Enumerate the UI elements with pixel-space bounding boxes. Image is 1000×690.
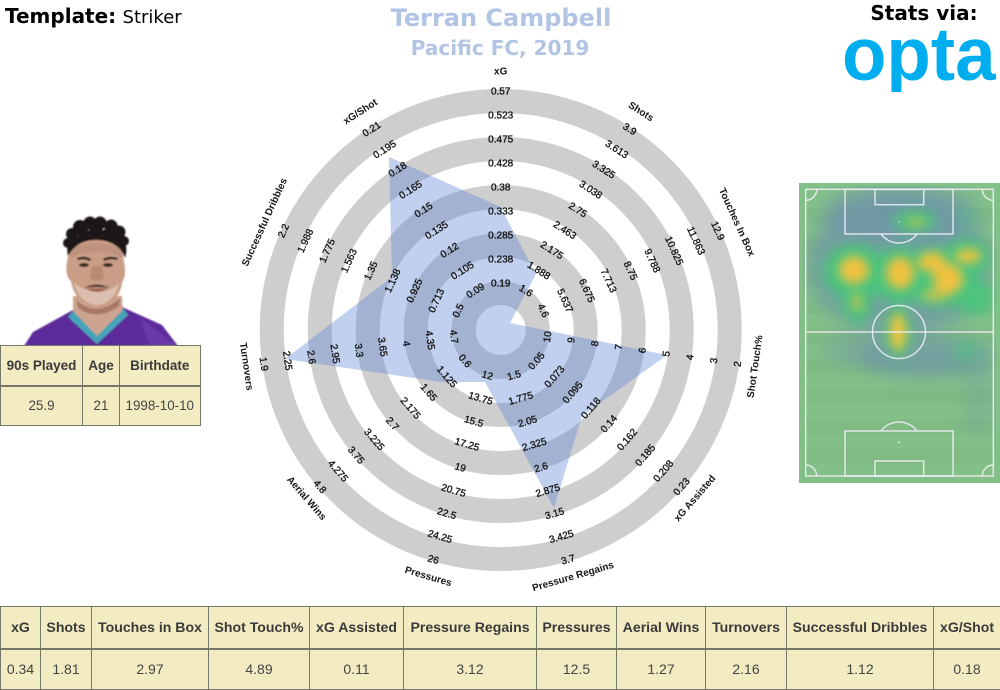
- axis: Successful Dribbles: 1.775: [318, 237, 338, 265]
- axis: xG Assisted: 0.073: [543, 364, 568, 390]
- axis: Touches In Box: 10.825: [662, 235, 685, 268]
- player info value row: 1998-10-10: [126, 398, 194, 413]
- metric header row: Pressure Regains: [410, 619, 530, 635]
- axis: xG Assisted: 0.14: [599, 413, 620, 435]
- axis: Shot Touch%: Shot Touch%: [746, 335, 766, 399]
- stats source label: Stats via:: [870, 1, 978, 25]
- axis: xG Assisted: 0.118: [579, 395, 604, 421]
- axis: xG: 0.428: [488, 158, 514, 170]
- player info value row: 21: [94, 398, 108, 413]
- axis: xG/Shot: xG/Shot: [342, 97, 380, 127]
- axis: Pressures: 26: [426, 553, 440, 567]
- metric value row: 0.11: [343, 661, 370, 677]
- axis: Pressure Regains: 2.6: [533, 461, 550, 475]
- metric header row: xG: [11, 619, 30, 635]
- metric value row: 12.5: [563, 661, 590, 677]
- axis: Shot Touch%: 8: [590, 340, 602, 347]
- axis: Touches In Box: Touches In Box: [716, 187, 757, 259]
- subtitle: Pacific FC, 2019: [411, 36, 589, 60]
- axis: xG/Shot: 0.12: [439, 241, 461, 261]
- axis: Shots: 3.038: [577, 179, 604, 202]
- axis: Successful Dribbles: 0.713: [427, 287, 447, 315]
- axis: Turnovers: 3.65: [375, 337, 389, 358]
- axis: xG Assisted: 0.208: [652, 458, 677, 485]
- axis: Pressures: 20.75: [440, 482, 467, 500]
- axis: Shots: 2.75: [566, 201, 589, 221]
- axis: xG: [488, 66, 514, 290]
- axis: xG/Shot: 0.105: [449, 259, 477, 283]
- axis: Touches In Box: 11.863: [684, 225, 707, 257]
- axis: Turnovers: 1.9: [257, 356, 270, 372]
- axis: Turnovers: 4.35: [423, 330, 436, 351]
- axis: Shot Touch%: 3: [709, 357, 720, 364]
- axis: xG: 0.475: [488, 134, 514, 146]
- axis: Shot Touch%: [538, 305, 766, 399]
- axis: xG Assisted: [514, 336, 718, 524]
- axis: Successful Dribbles: 0.5: [451, 302, 467, 320]
- axis: Touches In Box: 8.75: [621, 260, 639, 283]
- axis: Pressures: [403, 364, 512, 589]
- axis: xG: 0.57: [491, 86, 511, 98]
- metric header row: Pressures: [542, 619, 611, 635]
- table: player info: [0, 345, 200, 426]
- metric value row: 2.16: [732, 661, 760, 677]
- metric header row: xG Assisted: [316, 619, 397, 635]
- axis: Shots: 3.325: [590, 159, 617, 182]
- player value polygon: [285, 157, 667, 508]
- axis: xG: 0.19: [491, 278, 511, 290]
- axis: Touches In Box: 9.788: [641, 247, 662, 275]
- player photo: [24, 216, 178, 345]
- radar labels: [237, 66, 766, 594]
- player info header row: Birthdate: [130, 358, 189, 373]
- metric header row: Aerial Wins: [623, 619, 699, 635]
- axis: Pressures: 19: [453, 461, 467, 475]
- axis: xG Assisted: 0.095: [561, 379, 586, 406]
- axis: xG/Shot: 0.18: [387, 160, 410, 180]
- axis: Shots: [511, 100, 656, 304]
- axis: Turnovers: 4: [400, 340, 412, 348]
- axis: Touches In Box: 5.637: [554, 287, 575, 315]
- axis: Touches In Box: 7.713: [598, 267, 618, 295]
- axis: Pressure Regains: 1.775: [507, 390, 535, 408]
- axis: Aerial Wins: 1.125: [434, 364, 459, 391]
- axis: xG/Shot: 0.195: [372, 138, 399, 161]
- axis: Touches In Box: [522, 187, 757, 347]
- axis: Touches In Box: 4.6: [535, 302, 551, 320]
- axis: Touches In Box: 6.675: [576, 277, 597, 305]
- metric value row: 1.12: [846, 661, 874, 677]
- metric value row: 1.27: [647, 661, 675, 677]
- axis: Pressures: 22.5: [436, 506, 458, 522]
- pitch background: [799, 183, 1000, 483]
- table: metric values: [0, 606, 1000, 690]
- axis: xG Assisted: 0.185: [633, 442, 658, 469]
- pitch markings: [806, 189, 993, 476]
- metric value row: 0.18: [953, 661, 981, 677]
- axis: Shots: 2.463: [551, 219, 578, 242]
- axis: Turnovers: 3.3: [352, 343, 365, 359]
- axis: Turnovers: Turnovers: [237, 342, 255, 392]
- axis: Pressures: 15.5: [463, 414, 485, 430]
- metric value row: 2.97: [136, 661, 164, 677]
- axis: Successful Dribbles: 1.988: [296, 227, 316, 255]
- axis: xG: 0.38: [491, 182, 511, 194]
- axis: Successful Dribbles: 1.563: [339, 247, 360, 275]
- axis: Pressure Regains: 1.5: [506, 369, 523, 383]
- radar chart: [237, 66, 766, 594]
- axis: xG: 0.523: [488, 110, 514, 122]
- axis: xG Assisted: 0.23: [672, 476, 693, 498]
- heat layers: [807, 185, 995, 438]
- axis: Successful Dribbles: 0.925: [405, 277, 426, 305]
- metric value row: 4.89: [245, 661, 273, 677]
- axis: Pressure Regains: 3.7: [560, 553, 577, 568]
- axis: Turnovers: 2.95: [328, 343, 341, 365]
- axis: xG: 0.333: [488, 206, 514, 218]
- metric value row: 1.81: [52, 661, 80, 677]
- axis: xG: xG: [494, 66, 508, 78]
- axis: xG/Shot: [342, 97, 495, 306]
- axis: Aerial Wins: 2.7: [383, 415, 401, 433]
- grass stripes: [805, 209, 994, 464]
- metric value row: 0.34: [7, 661, 34, 677]
- axis: Shots: 1.6: [517, 283, 535, 300]
- axis: Touches In Box: 12.9: [708, 220, 726, 243]
- axis: Successful Dribbles: 2.2: [276, 222, 292, 240]
- axis: Shots: 3.9: [621, 121, 639, 138]
- axis: xG Assisted: 0.05: [526, 350, 548, 372]
- axis: Aerial Wins: 4.8: [311, 478, 328, 496]
- axis: xG/Shot: 0.21: [361, 120, 384, 140]
- metric header row: Successful Dribbles: [793, 619, 927, 635]
- axis: Turnovers: [237, 312, 462, 392]
- axis: Pressure Regains: Pressure Regains: [531, 560, 616, 594]
- axis: Aerial Wins: 1.65: [418, 382, 439, 404]
- player info value row: 25.9: [28, 398, 55, 413]
- axis: Pressure Regains: 2.325: [521, 436, 548, 454]
- metric header row: Shot Touch%: [214, 619, 304, 635]
- axis: Shot Touch%: 10: [542, 330, 555, 343]
- axis: Shot Touch%: 2: [732, 360, 744, 368]
- player info header row: [7, 358, 194, 413]
- template label: Template: Striker: [5, 4, 182, 28]
- axis: Shot Touch%: 7: [614, 343, 625, 351]
- axis: Turnovers: 2.6: [304, 350, 317, 365]
- axis: Shots: Shots: [626, 100, 656, 124]
- grey concentric rings: [272, 101, 730, 559]
- metric header row: xG/Shot: [940, 619, 994, 635]
- axis: Pressures: 13.75: [467, 390, 494, 408]
- axis: Pressure Regains: [472, 359, 616, 594]
- axis: xG: 0.285: [488, 230, 514, 242]
- metric header row: Turnovers: [712, 619, 780, 635]
- player info value row: [28, 398, 194, 413]
- metric header row: [7, 619, 994, 677]
- axis: Pressure Regains: 2.05: [517, 414, 539, 430]
- axis: Shot Touch%: 4: [685, 353, 697, 361]
- axis: Aerial Wins: Aerial Wins: [284, 474, 328, 523]
- metric value row: 3.12: [456, 661, 484, 677]
- metric header row: Touches in Box: [98, 619, 202, 635]
- axis: Successful Dribbles: 1.35: [362, 259, 381, 282]
- axis: Shots: 3.613: [603, 139, 630, 162]
- axis: xG/Shot: 0.09: [465, 281, 487, 301]
- axis: xG/Shot: 0.15: [413, 200, 435, 220]
- axis: Pressure Regains: 3.15: [544, 506, 566, 522]
- axis: Shot Touch%: 6: [637, 347, 649, 354]
- axis: Pressure Regains: 2.875: [534, 482, 562, 500]
- axis: Pressures: 24.25: [426, 528, 454, 546]
- title: Terran Campbell: [391, 4, 611, 32]
- metric value row: [7, 661, 981, 677]
- axis: Aerial Wins: 3.225: [361, 427, 386, 453]
- axis: Pressures: 12: [480, 369, 494, 383]
- axis: Shots: 2.175: [538, 240, 565, 263]
- axis: Aerial Wins: 0.6: [456, 353, 473, 371]
- axis: Turnovers: 2.25: [280, 350, 294, 372]
- metric header row: Shots: [46, 619, 86, 635]
- axis: Successful Dribbles: [240, 176, 484, 357]
- axis: xG Assisted: xG Assisted: [672, 473, 718, 524]
- axis: Aerial Wins: 2.175: [398, 396, 423, 422]
- axis: Aerial Wins: 3.75: [345, 445, 366, 467]
- axis: Shot Touch%: 5: [661, 350, 673, 357]
- axis: xG: 0.238: [488, 254, 514, 266]
- player info header row: 90s Played: [7, 358, 76, 373]
- axis: Aerial Wins: [284, 337, 487, 523]
- axis: Turnovers: 4.7: [447, 329, 460, 345]
- axis: Aerial Wins: 4.275: [325, 458, 350, 485]
- axis: Shots: 1.888: [525, 260, 552, 283]
- axis: xG/Shot: 0.165: [397, 179, 425, 202]
- player info header row: Age: [88, 358, 114, 373]
- axis: Successful Dribbles: 1.138: [383, 267, 404, 295]
- heatmap pitch: [799, 183, 1000, 483]
- axis: Pressures: 17.25: [453, 436, 481, 454]
- axis: xG Assisted: 0.162: [615, 427, 640, 453]
- axis: xG/Shot: 0.135: [423, 219, 451, 242]
- axis: Shot Touch%: 9: [566, 336, 578, 344]
- axis: Pressure Regains: 3.425: [548, 528, 576, 546]
- axis: Successful Dribbles: Successful Dribbles: [240, 176, 290, 268]
- axis: Pressures: Pressures: [403, 565, 453, 589]
